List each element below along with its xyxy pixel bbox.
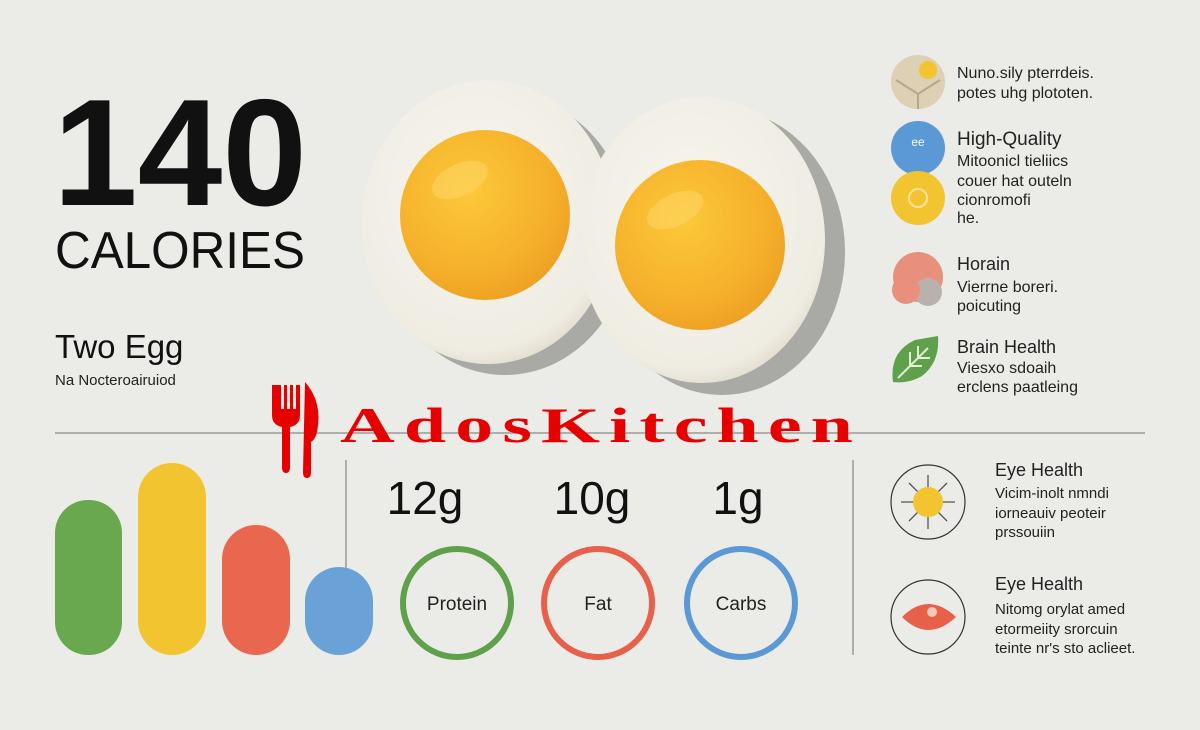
benefit 6: eye health eye: Eye Health	[995, 574, 1083, 594]
benefit 3: horain	[892, 252, 1058, 315]
benefit 5: eye health sun: prssouiin	[995, 524, 1055, 541]
egg left	[362, 80, 630, 375]
benefit 1	[891, 55, 1094, 109]
benefit 4: brain health: erclens paatleing	[957, 379, 1078, 396]
subtitle: two egg	[55, 328, 183, 389]
subtitle: two egg: Two Egg	[55, 328, 183, 365]
macro: fat: 10g	[554, 472, 630, 524]
macro: protein: Protein	[427, 594, 487, 615]
subtitle: two egg: Na Nocteroairuiod	[55, 372, 176, 389]
benefit 1: Nuno.sily pterrdeis.	[957, 65, 1094, 82]
macro: carbs: Carbs	[716, 594, 766, 615]
benefit 3: horain: Horain	[957, 254, 1010, 274]
benefit 6: eye health eye: Nitomg orylat amed	[995, 601, 1125, 618]
benefit 4: brain health: Brain Health	[957, 337, 1056, 357]
benefit 6: eye health eye: teinte nr's sto aclieet.	[995, 640, 1135, 657]
benefit 4: brain health: Viesxo sdoaih	[957, 360, 1056, 377]
benefit 5: eye health sun	[891, 460, 1109, 541]
title: 140 calories: CALORIES	[55, 222, 305, 280]
benefit 5: eye health sun: Eye Health	[995, 460, 1083, 480]
benefit 2: high-quality: he.	[957, 210, 979, 227]
benefit 2: high-quality	[891, 121, 1072, 227]
benefit 5: eye health sun: iorneauiv peoteir	[995, 505, 1106, 522]
macro: fat: Fat	[584, 594, 612, 615]
benefit 6: eye health eye	[891, 574, 1135, 657]
benefit 3: horain: poicuting	[957, 298, 1021, 315]
benefit 3: horain: Vierrne boreri.	[957, 279, 1058, 296]
title: 140 calories: 140	[53, 68, 307, 238]
benefit 2: high-quality: ee	[911, 135, 925, 149]
benefit 2: high-quality: couer hat outeln	[957, 173, 1072, 190]
macro: protein	[387, 472, 511, 657]
watermark: AdosKitchen	[272, 382, 862, 478]
benefit 5: eye health sun: Vicim-inolt nmndi	[995, 485, 1109, 502]
benefit 2: high-quality: cionromofi	[957, 192, 1031, 209]
bar chart	[55, 463, 373, 655]
eggs illustration	[362, 80, 845, 395]
macro: carbs: 1g	[712, 472, 764, 524]
benefit 4: brain health	[892, 336, 1078, 396]
watermark: AdosKitchen: AdosKitchen	[340, 397, 862, 453]
macro: carbs	[687, 472, 795, 657]
egg right	[579, 97, 845, 395]
benefit 6: eye health eye: etormeiity srorcuin	[995, 621, 1118, 638]
benefit 2: high-quality: Mitoonicl tieliics	[957, 153, 1068, 170]
macro: fat	[544, 472, 652, 657]
macro: protein: 12g	[387, 472, 463, 524]
benefit 1: potes uhg plototen.	[957, 85, 1093, 102]
benefit 2: high-quality: High-Quality	[957, 129, 1062, 150]
